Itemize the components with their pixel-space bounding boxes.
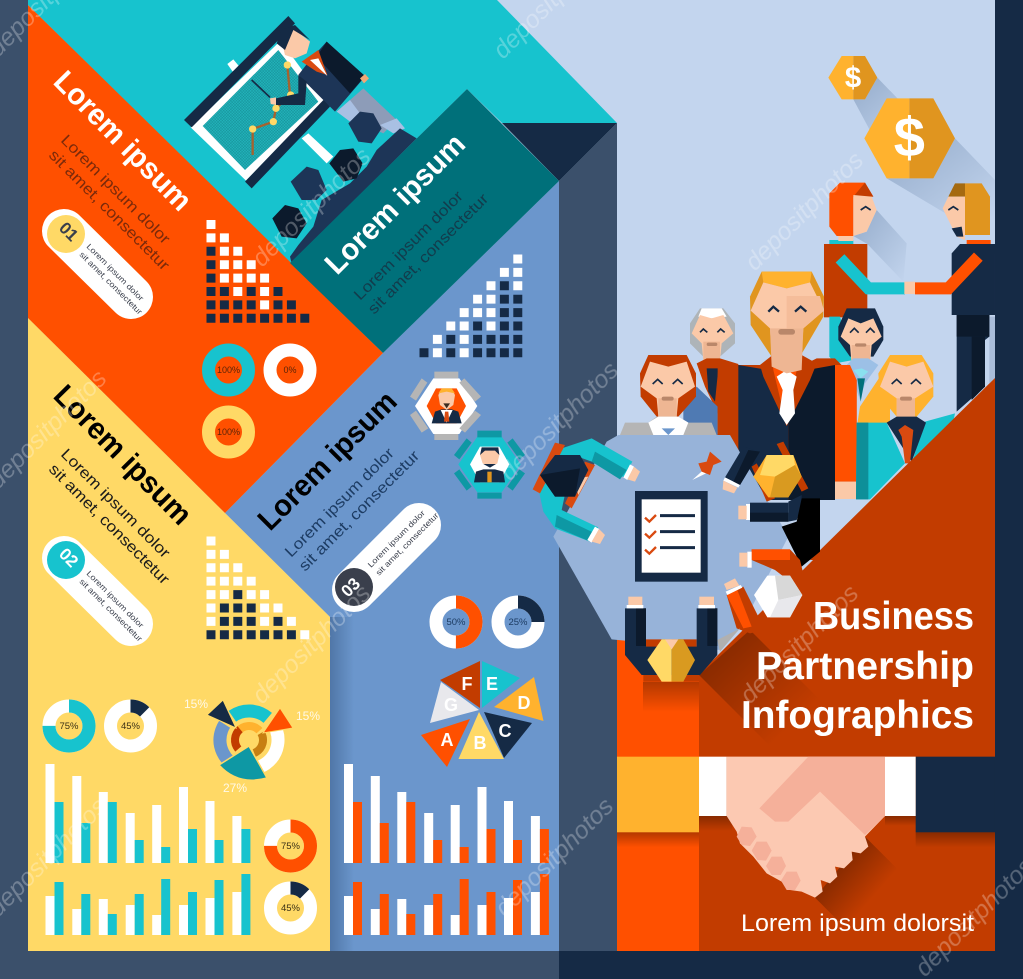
- meeting table group: [533, 435, 820, 682]
- callout pill 01: sit amet, consectetur: [78, 250, 144, 317]
- figure: handshake man: [904, 183, 995, 412]
- figure: lower-right seated person: [724, 549, 804, 633]
- icon: small coin: $: [845, 62, 861, 95]
- audience silhouettes: [272, 112, 417, 263]
- table surface: [553, 435, 788, 650]
- callout pill 03: Lorem ipsum dolor: [366, 508, 427, 569]
- watermarks: depositphotos: [734, 579, 864, 709]
- body copy: sit amet, consectetur: [365, 191, 492, 318]
- icon: presenter at chart board: [184, 16, 417, 263]
- yellow panel text: [45, 379, 198, 588]
- callout pill 01: [47, 215, 146, 317]
- figure: handshake woman: [824, 183, 907, 317]
- radial chart: yellow panel: 15%: [296, 709, 320, 723]
- bar chart: yellow upper: [46, 764, 250, 863]
- body copy: [351, 188, 492, 318]
- shadow: seated person on block: [699, 630, 820, 745]
- watermarks: depositphotos: [489, 792, 619, 922]
- pixel chart: blue panel: [420, 254, 522, 357]
- panel: title and handshake block: [617, 378, 995, 951]
- figure: teal standing back woman: [829, 317, 853, 363]
- icon: small coin: [828, 56, 922, 137]
- watermarks: depositphotos: [739, 146, 869, 276]
- figure: bottom seated person: [625, 597, 740, 682]
- body copy: [282, 445, 423, 575]
- watermarks: depositphotos: [246, 142, 376, 272]
- pie chart: lettered segments: E: [486, 674, 498, 694]
- shadow: seated person on orange column: [643, 682, 699, 712]
- figure: blond woman: [856, 355, 955, 499]
- subtitle: Lorem ipsum dolorsit: [741, 910, 974, 937]
- callout pill 01: 01: [55, 218, 82, 245]
- callout pill 02: Lorem ipsum dolor: [85, 569, 146, 630]
- icon: avatar hexagon teal: [454, 431, 525, 499]
- icon: clasped hands: [727, 757, 885, 898]
- callout pill 01: Lorem ipsum dolor: [85, 242, 146, 303]
- icon: large coin: [864, 98, 995, 220]
- amber square: [617, 757, 699, 832]
- donut charts: blue panel: [436, 602, 538, 642]
- figure: red haired woman: [620, 355, 718, 437]
- dark teal panel text: [319, 128, 492, 318]
- pie chart: lettered segments: D: [518, 693, 530, 713]
- donut charts: orange panel: 0%: [283, 365, 297, 375]
- board frame: [191, 41, 324, 181]
- line chart on board: [249, 61, 294, 155]
- body copy: Lorem ipsum dolor: [282, 445, 398, 561]
- donut charts: yellow panel lower: 45%: [281, 903, 301, 914]
- heading: Lorem ipsum: [47, 65, 198, 218]
- figure: grey haired man: [690, 308, 738, 448]
- shadows: [617, 832, 699, 847]
- donut charts: yellow panel top: 45%: [121, 721, 141, 732]
- radial chart: yellow panel: 27%: [223, 781, 247, 795]
- title: Infographics: [741, 694, 974, 737]
- icon: avatar hexagon orange: [410, 372, 481, 440]
- bar chart: yellow lower: [46, 874, 250, 935]
- body copy: sit amet, consectetur: [45, 147, 172, 274]
- body copy: sit amet, consectetur: [45, 461, 172, 588]
- donut charts: yellow panel lower: [270, 826, 310, 928]
- icon: large coin: $: [894, 106, 925, 169]
- board stand: [227, 59, 333, 163]
- panel: dark teal ribbon: [290, 89, 559, 353]
- watermarks: depositphotos: [246, 579, 376, 709]
- pie chart: lettered segments: G: [444, 695, 458, 715]
- title: [741, 595, 974, 737]
- body copy: Lorem ipsum dolor: [57, 446, 173, 562]
- panel: orange diagonal: [28, 5, 383, 513]
- callout pill 02: sit amet, consectetur: [78, 577, 144, 644]
- bar chart: blue upper: [344, 764, 549, 863]
- handshake band: [617, 757, 995, 931]
- body copy: sit amet, consectetur: [296, 448, 423, 575]
- callout pill 03: [335, 508, 441, 606]
- donut charts: orange panel: [208, 350, 310, 452]
- radial chart: yellow panel: 15%: [184, 697, 208, 711]
- figure: black haired man: [838, 308, 883, 402]
- heading: Lorem ipsum: [319, 128, 472, 281]
- figure: top-left seated person: [533, 438, 640, 544]
- radial chart: yellow panel: [184, 697, 320, 795]
- presenter figure: [252, 25, 405, 133]
- donut charts: yellow panel lower: 75%: [281, 841, 301, 852]
- callout pill 02: [47, 541, 146, 644]
- heading: Lorem ipsum: [252, 385, 404, 537]
- icon: clipboard: [635, 491, 708, 582]
- donut charts: blue panel: 25%: [508, 617, 528, 628]
- donut charts: orange panel: 100%: [217, 427, 240, 437]
- pie chart: lettered segments: B: [474, 733, 486, 753]
- callout pill 02: 02: [55, 544, 82, 571]
- donut charts: orange panel: 100%: [217, 365, 240, 375]
- callout pill 03: 03: [337, 574, 364, 601]
- blue panel text: [252, 385, 423, 575]
- title: Business: [813, 595, 974, 638]
- pie chart: lettered segments: [421, 661, 544, 767]
- donut charts: yellow panel top: 75%: [59, 721, 79, 732]
- orange panel text: [45, 65, 198, 274]
- heading: Lorem ipsum: [47, 379, 198, 532]
- panel: teal top: [28, 0, 617, 263]
- white cuffs: [699, 757, 727, 816]
- figure: top-right seated person: [723, 442, 820, 567]
- pixel chart: yellow panel: [206, 536, 309, 639]
- panel: blue column: [225, 181, 559, 951]
- bar chart: blue lower: [344, 874, 549, 935]
- watermarks: depositphotos: [494, 356, 624, 486]
- figure: main man: [718, 272, 857, 500]
- title: Partnership: [756, 645, 974, 688]
- pixel chart: orange panel: [206, 220, 309, 323]
- pie chart: lettered segments: C: [498, 721, 512, 741]
- navy sleeve: [916, 757, 995, 832]
- triangle overlay: title block fold: [810, 378, 995, 560]
- people group: [620, 56, 995, 500]
- pie chart: lettered segments: A: [440, 730, 454, 750]
- body copy: Lorem ipsum dolor: [57, 132, 173, 248]
- icon: push pin: [692, 452, 722, 480]
- callout pill 03: sit amet, consectetur: [374, 511, 441, 577]
- body copy: Lorem ipsum dolor: [351, 188, 467, 304]
- donut charts: yellow panel top: [49, 706, 150, 746]
- donut charts: blue panel: 50%: [446, 617, 466, 628]
- pie chart: lettered segments: F: [462, 674, 472, 694]
- panel: yellow column: [28, 318, 354, 951]
